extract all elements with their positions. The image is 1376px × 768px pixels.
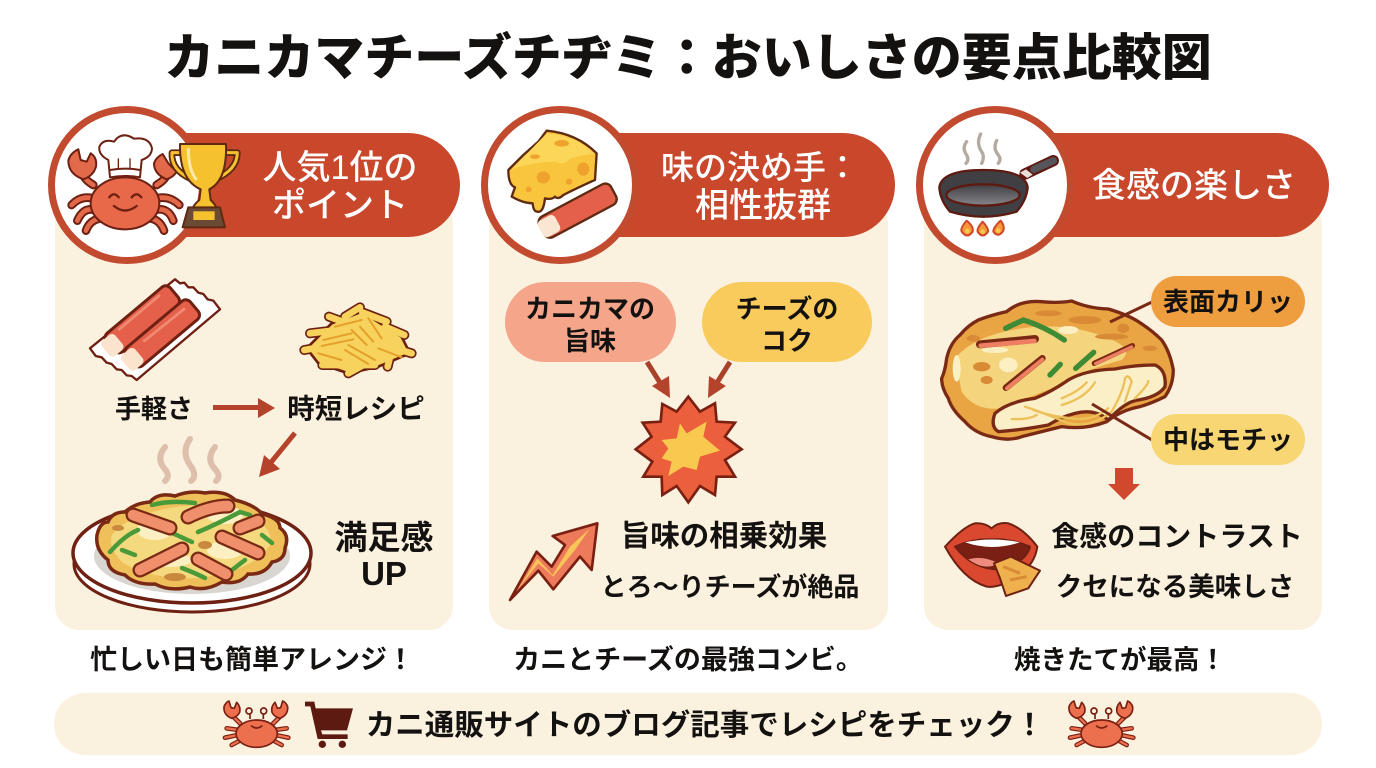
callout: crispy surface: 表面カリッ (1163, 287, 1293, 317)
bubble: crab umami (505, 282, 676, 362)
label: satisfaction up: UP (361, 555, 407, 592)
icon: pancake on plate (73, 492, 311, 612)
bubble: cheese richness: チーズの (736, 294, 838, 324)
label: satisfaction up: 満足感 (334, 519, 434, 556)
icon: frying pan (939, 134, 1053, 235)
bubble: cheese richness: コク (761, 326, 813, 356)
header: popularity (52, 110, 460, 260)
title: カニカマチーズチヂミ：おいしさの要点比較図 (164, 30, 1212, 86)
header: taste (484, 110, 895, 260)
icon: mouth biting (945, 523, 1040, 596)
icon: crab right (1069, 701, 1133, 747)
arrow: quick to satisfaction (259, 433, 295, 477)
bubble: cheese richness (702, 282, 872, 362)
icon: steam (160, 439, 219, 481)
caption: popularity: 忙しい日も簡単アレンジ！ (90, 645, 414, 675)
callout: crispy surface (1110, 276, 1305, 327)
header: popularity: ポイント (272, 187, 408, 225)
header: texture: 食感の楽しさ (1092, 167, 1296, 205)
label: melty cheese: とろ〜りチーズが絶品 (601, 572, 859, 602)
icon: crab stick pack (90, 279, 220, 380)
icon: shredded cheese (304, 307, 412, 373)
label: texture contrast: 食感のコントラスト (1051, 521, 1303, 552)
arrow: down (1108, 468, 1140, 500)
panel: taste (484, 110, 895, 630)
icon: cut pancake (942, 301, 1173, 439)
icon: burst (636, 397, 742, 502)
header: texture (920, 110, 1329, 260)
icon: rising arrow (510, 523, 597, 600)
caption: texture: 焼きたてが最高！ (1014, 645, 1226, 675)
label: ease: 手軽さ (115, 394, 193, 424)
label: satisfaction up (334, 519, 434, 592)
text: call to action: カニ通販サイトのブログ記事でレシピをチェック！ (366, 708, 1044, 742)
icon: shopping cart (305, 702, 353, 748)
label: quick recipe: 時短レシピ (287, 393, 425, 424)
icon: cheese and crab stick (508, 131, 619, 240)
arrow: ease to quick (213, 398, 275, 418)
header: taste: 味の決め手： (661, 149, 859, 186)
label: synergy: 旨味の相乗効果 (621, 520, 827, 553)
panel: popularity (52, 110, 460, 630)
caption: taste: カニとチーズの最強コンビ。 (513, 644, 863, 675)
callout: chewy inside: 中はモチッ (1163, 425, 1293, 455)
bubble: crab umami: カニカマの (525, 294, 655, 324)
banner: call to action (54, 693, 1322, 755)
arrows to burst (647, 362, 730, 398)
callout: chewy inside (1092, 404, 1305, 465)
icon: crab left (224, 701, 288, 747)
panel: texture (920, 110, 1329, 630)
bubble: crab umami: 旨味 (564, 326, 616, 356)
label: addictive taste: クセになる美味しさ (1056, 572, 1294, 602)
header: popularity: 人気1位の (263, 149, 417, 187)
header: taste: 相性抜群 (695, 187, 831, 225)
icon: chef crab (68, 135, 179, 231)
icon: trophy (172, 144, 237, 227)
